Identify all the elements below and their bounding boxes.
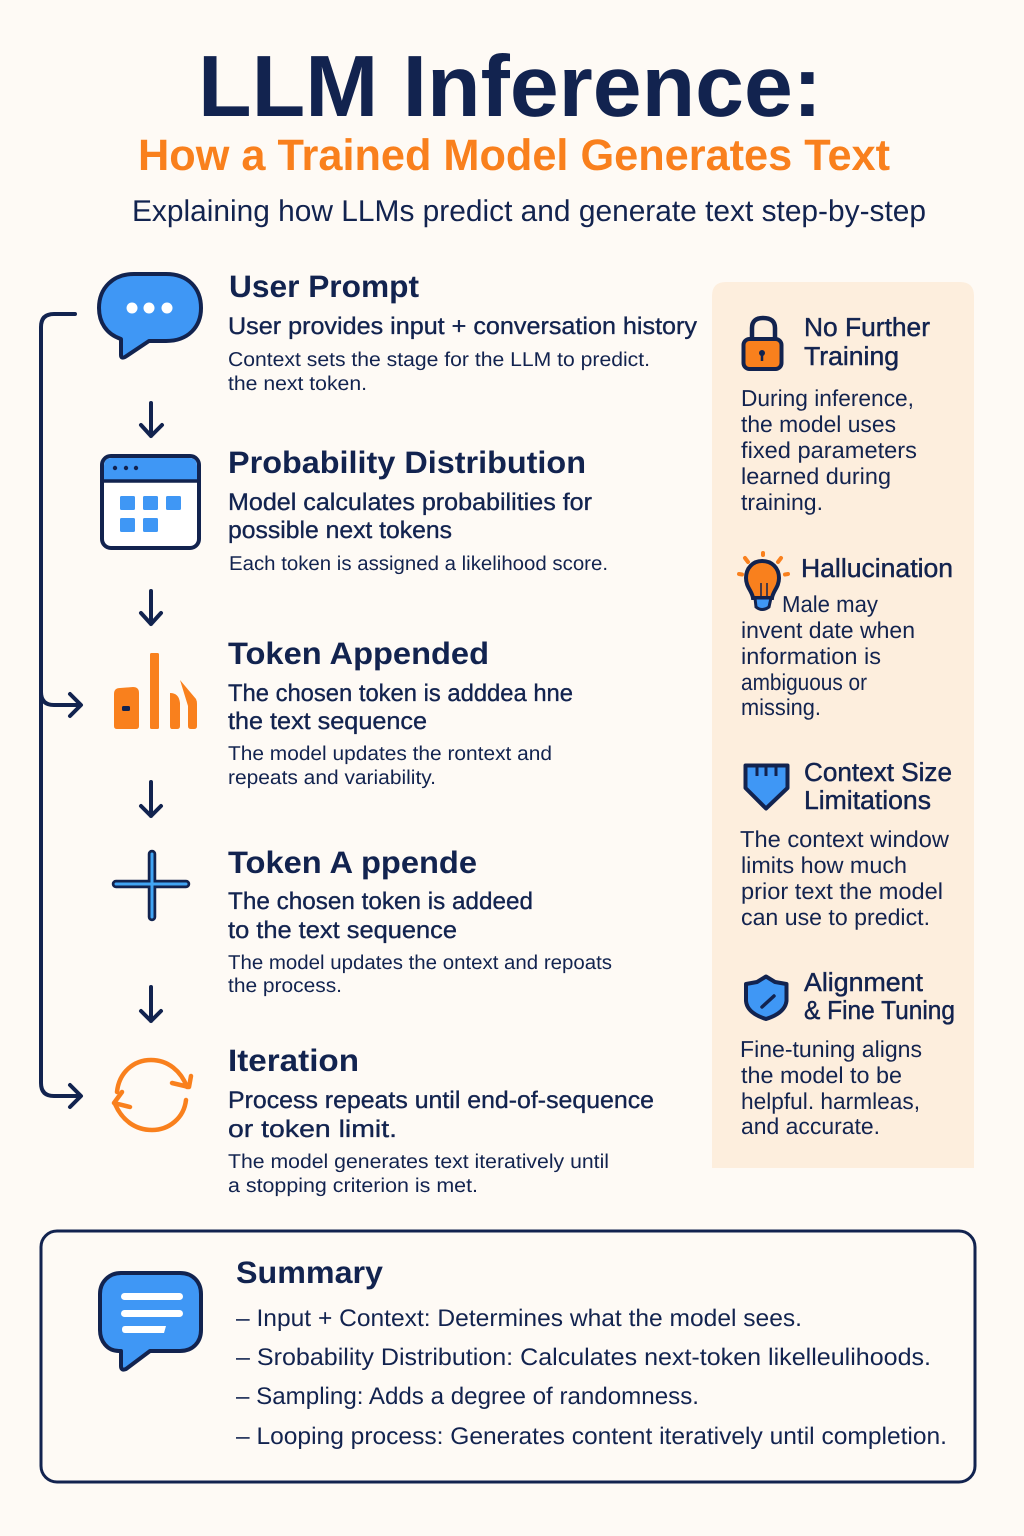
- subtitle: How a Trained Model Generates Text: [138, 131, 890, 180]
- feedback loop bracket arrow: [41, 314, 81, 1107]
- icon: plus: [116, 854, 186, 917]
- no further training: training.: [741, 489, 823, 515]
- arrow: prompt to distribution: [141, 403, 162, 436]
- step: token appended: The model updates the rontext and: [228, 743, 552, 765]
- panel: summary: [41, 1231, 975, 1482]
- no further training: No Further: [804, 312, 930, 342]
- context size limitations: prior text the model: [741, 878, 943, 904]
- step: probability distribution: possible next tokens: [228, 517, 452, 544]
- summary list: – Sampling: Adds a degree of randomness.: [236, 1383, 699, 1410]
- icon: light bulb: [739, 553, 788, 610]
- step: iteration: Iteration: [228, 1043, 359, 1078]
- context size limitations: The context window: [740, 826, 949, 852]
- alignment and fine tuning: [740, 967, 955, 1139]
- arrow: append to iteration: [141, 987, 161, 1021]
- step: token appended second: The model updates the ontext and repoats: [228, 952, 612, 974]
- context size limitations: Context Size: [804, 757, 952, 787]
- alignment and fine tuning: the model to be: [741, 1062, 902, 1088]
- icon: refresh cycle: [114, 1060, 191, 1130]
- no further training: fixed parameters: [741, 437, 917, 463]
- context size limitations: limits how much: [741, 852, 907, 878]
- icon: ruler shield: [746, 766, 788, 808]
- no further training: [741, 312, 930, 515]
- context size limitations: can use to predict.: [741, 904, 930, 930]
- hallucination: invent date when: [741, 617, 915, 643]
- alignment and fine tuning: & Fine Tuning: [804, 995, 955, 1025]
- no further training: the model uses: [741, 411, 896, 437]
- no further training: learned during: [741, 463, 891, 489]
- step: user prompt: User Prompt: [229, 269, 419, 304]
- step: token appended second: Token A ppende: [228, 845, 477, 880]
- icon: app window grid: [102, 456, 199, 548]
- step: token appended second: The chosen token is addeed: [228, 888, 533, 915]
- summary heading: Summary: [236, 1255, 384, 1290]
- step: iteration: [228, 1043, 654, 1197]
- step: iteration: or token limit.: [228, 1116, 397, 1143]
- hallucination: information is: [741, 643, 881, 669]
- step: probability distribution: [228, 445, 608, 575]
- title: LLM Inference:: [198, 38, 822, 135]
- step: token appended: The chosen token is adddea hne: [228, 680, 573, 707]
- step: user prompt: Context sets the stage for the LLM to predict.: [228, 349, 650, 371]
- step: token appended: [228, 636, 573, 789]
- icon: summary speech bubble: [100, 1273, 201, 1370]
- step: token appended: Token Appended: [228, 636, 489, 671]
- no further training: Training: [804, 341, 899, 371]
- step: token appended: the text sequence: [228, 708, 427, 735]
- step: token appended second: [228, 845, 612, 997]
- icon: orange bars: [114, 653, 197, 729]
- step: user prompt: the next token.: [228, 373, 367, 395]
- panel: considerations sidebar: [712, 282, 974, 1168]
- summary list: [236, 1305, 947, 1450]
- no further training: During inference,: [741, 385, 914, 411]
- step: probability distribution: Probability Distribution: [228, 445, 586, 480]
- step: iteration: Process repeats until end-of-sequence: [228, 1087, 654, 1114]
- icon: padlock: [744, 318, 782, 369]
- alignment and fine tuning: and accurate.: [741, 1113, 880, 1139]
- alignment and fine tuning: Fine-tuning aligns: [740, 1036, 922, 1062]
- arrow: token to append: [141, 782, 161, 816]
- hallucination: missing.: [741, 694, 821, 720]
- icon: speech bubble with dots: [99, 274, 201, 358]
- arrow: distribution to token: [141, 591, 161, 624]
- hallucination: Male may: [782, 591, 878, 617]
- summary list: – Input + Context: Determines what the model sees.: [236, 1305, 802, 1332]
- step: iteration: The model generates text iteratively until: [228, 1151, 609, 1173]
- hallucination: [741, 553, 953, 720]
- step: user prompt: User provides input + conversation history: [228, 313, 697, 340]
- step: token appended second: the process.: [228, 975, 342, 997]
- step: user prompt: [228, 269, 697, 395]
- summary list: – Looping process: Generates content iteratively until completion.: [236, 1423, 947, 1450]
- step: iteration: a stopping criterion is met.: [228, 1175, 478, 1197]
- alignment and fine tuning: Alignment: [804, 967, 924, 997]
- step: probability distribution: Each token is assigned a likelihood score.: [229, 553, 608, 575]
- hallucination: Hallucination: [801, 553, 953, 583]
- step: token appended: repeats and variability.: [228, 767, 436, 789]
- step: probability distribution: Model calculates probabilities for: [228, 489, 592, 516]
- context size limitations: [740, 757, 952, 930]
- summary list: – Srobability Distribution: Calculates next-token likelleulihoods.: [236, 1344, 931, 1371]
- alignment and fine tuning: helpful. harmleas,: [741, 1088, 920, 1114]
- icon: shield: [746, 976, 786, 1019]
- step: token appended second: to the text sequence: [228, 917, 457, 944]
- hallucination: ambiguous or: [741, 669, 867, 695]
- tagline: Explaining how LLMs predict and generate text step-by-step: [132, 195, 926, 228]
- context size limitations: Limitations: [804, 785, 931, 815]
